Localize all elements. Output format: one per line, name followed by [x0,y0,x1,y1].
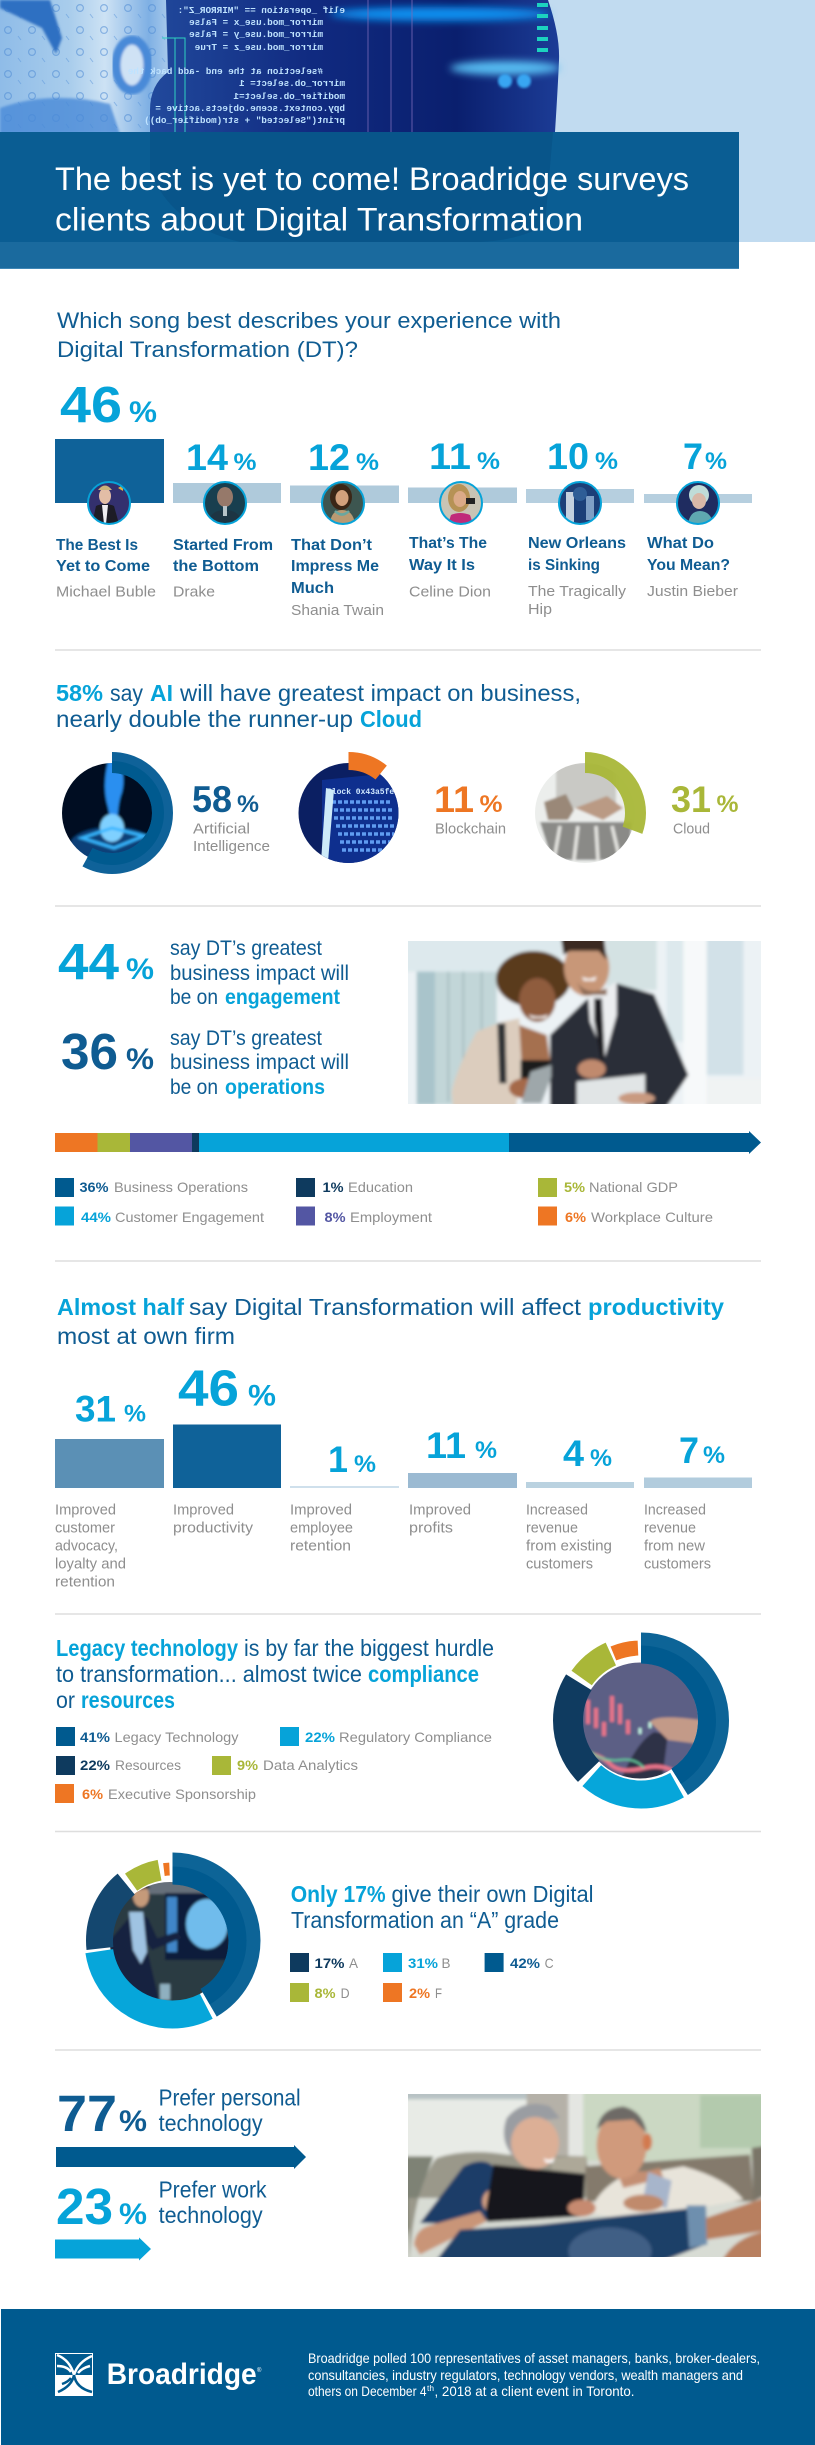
value: 12% [308,437,379,478]
legend: 44% Customer Engagement: Customer Engagement [115,1209,264,1225]
heading: song question [57,308,561,362]
stat: 11% Blockchain: Blockchain [435,820,506,838]
chart: legacy technology donut [567,1646,715,1794]
stat: 31% Cloud: % [716,791,738,818]
legend: 5% National GDP: 5% [564,1179,586,1195]
legend: 8% Employment [296,1206,432,1226]
stat: 58% Artificial Intelligence: 58 [192,779,232,820]
stat: 58% Artificial Intelligence [192,779,270,855]
heading: legacy technology: resources [81,1687,175,1713]
label: revenue existing customers: Increased [526,1502,588,1519]
stat: 77% prefer personal: 77 [57,2085,117,2142]
heading: A grade: Transformation an “A” grade [291,1907,559,1933]
legend: 6% Workplace Culture: 6% [565,1209,587,1225]
label: New Orleans is Sinking: New Orleans [528,535,626,552]
heading: legacy technology: compliance [368,1661,479,1687]
label: Started From the Bottom [173,537,273,600]
value: 1% [328,1439,376,1480]
stat: 44% engagement: % [126,953,154,986]
panel: DT grades [98,1866,594,2014]
legend: 31% B [383,1953,450,1972]
value: 4% [563,1433,612,1474]
stat: 44% engagement [58,933,349,1009]
value: 11% [426,1425,497,1466]
chart: AI donut 58% [62,752,173,874]
panel: personal vs work technology [55,2088,761,2260]
heading: AI impact [56,680,581,732]
label: customer advocacy [55,1502,126,1591]
heading: AI impact: say [110,680,143,706]
value: 11%: % [475,1437,497,1464]
label: customer advocacy: retention [55,1574,115,1591]
legend: 36% Business Operations: Business Operations [114,1179,248,1195]
label: profits: profits [409,1520,453,1537]
value: 46%: % [248,1380,276,1412]
value: 14%: % [234,449,256,476]
label: revenue existing customers: revenue [526,1520,578,1537]
value: 14% [186,437,256,478]
legend: 44% Customer Engagement: 44% [81,1209,112,1225]
legend: 1% Education [296,1178,413,1197]
arrow: 23% [55,2238,151,2260]
label: That's The Way It Is: That’s The [409,535,487,552]
value: 12%: % [356,449,379,476]
stat: 23% prefer work [56,2177,267,2235]
stat: 77% prefer personal: Prefer personal [159,2084,301,2110]
icon: portrait Shania Twain [322,482,364,524]
heading: productivity: Almost half [57,1294,184,1320]
stat: 36% operations [61,1023,349,1099]
code text: mirror_mod.use_x = False [189,17,323,28]
footer text: th [427,2384,434,2393]
label: revenue new customers: from new [644,1538,705,1555]
label: What Do You Mean?: Justin Bieber [647,583,738,600]
value: 46%: 46 [178,1360,239,1416]
value: 7%: % [705,448,727,475]
legend: 17% A: 17% [314,1955,345,1971]
legend: 42% C [485,1953,554,1972]
footer text: , 2018 at a client event in Toronto. [434,2383,634,2399]
icon: portrait Drake [204,482,246,524]
label: The Best Is Yet to Come: The Best Is [56,537,138,554]
icon: portrait Justin Bieber [677,482,719,524]
chart: blockchain donut 11%: Block 0x43a5fe [327,788,394,797]
title: The best is yet to come! Broadridge surveys [55,161,689,197]
legend: 22% Resources: Resources [115,1757,181,1773]
heading: AI impact: AI [150,680,173,706]
icon: portrait The Tragically Hip [559,482,601,524]
label: employee retention: Improved [290,1502,352,1519]
stat: 23% prefer work: % [119,2198,147,2231]
value: 10% [547,436,618,477]
stat: 77% prefer personal: technology [159,2110,263,2136]
legend: 6% Workplace Culture [538,1206,713,1226]
label: New Orleans is Sinking: Hip [528,601,552,618]
heading: AI impact: nearly double the runner-up [56,706,353,732]
label: revenue existing customers [526,1502,612,1573]
title: clients about Digital Transformation [55,202,583,238]
stat: 31% Cloud: Cloud [673,820,710,838]
stat: 44% engagement: say DT’s greatest [170,937,322,960]
title [55,161,689,238]
footer text: others on December 4 [308,2383,427,2399]
value: 7% [679,1430,725,1471]
label: What Do You Mean?: What Do [647,535,714,552]
stat: 36% operations: 36 [61,1023,118,1080]
label: revenue new customers: revenue [644,1520,696,1537]
code text: mirror_ob.select= 1 [239,78,345,89]
legend: 2% F: F [435,1985,442,2001]
label: That Don't Impress Me Much: That Don’t [291,537,372,554]
heading: legacy technology: is by far the biggest hurdle [244,1635,494,1661]
label: customer advocacy: Improved [55,1502,116,1519]
panel: header [0,0,815,269]
value: 7% [683,436,727,477]
value: 46%: % [129,396,157,429]
code text: mirror_mod.use_z = True [194,42,323,53]
panel: footer [1,2309,815,2445]
stat: 11% Blockchain: 11 [434,779,474,820]
legend: 8% D: 8% [314,1985,336,2001]
photo: two colleagues with tablet [408,941,761,1104]
label: revenue new customers: Increased [644,1502,706,1519]
photo: couple on sofa [408,2094,761,2257]
stat: 23% prefer work: technology [159,2202,263,2228]
footer text: consultancies, industry regulators, technology vendors, wealth managers and [308,2367,743,2383]
value: 46%: 46 [60,376,122,433]
value: 1%: 1 [328,1439,348,1480]
legend: 8% D [290,1983,350,2002]
legend: 5% National GDP: National GDP [589,1179,678,1195]
legend: 9% Data Analytics: 9% [237,1757,259,1773]
heading: productivity: productivity [588,1294,724,1320]
stat: 31% Cloud [671,779,738,838]
legend: 41% Legacy Technology [56,1727,238,1746]
label: revenue existing customers: customers [526,1556,593,1573]
value: 4%: 4 [563,1433,584,1474]
legend: 17% A: A [349,1955,359,1971]
heading: legacy technology: or [56,1687,75,1713]
label: revenue existing customers: from existing [526,1538,612,1555]
value: 7%: % [703,1442,725,1469]
chart: cloud donut 31% [535,752,646,863]
label: That's The Way It Is [409,535,491,600]
value: 12%: 12 [308,437,350,478]
heading: legacy technology: Legacy technology [56,1635,238,1661]
heading: A grade [291,1881,594,1933]
value: 11%: 11 [429,436,471,477]
icon: portrait Michael Buble [88,482,130,524]
value: 10%: 10 [547,436,589,477]
legend: 22% Resources: 22% [80,1757,111,1773]
heading: legacy technology: to transformation... almost twice [56,1661,362,1687]
value: 31% [75,1388,146,1430]
heading: productivity [57,1294,724,1349]
label: employee retention: retention [290,1538,351,1555]
label: profits [409,1502,471,1537]
label: New Orleans is Sinking: The Tragically [528,583,627,600]
label: customer advocacy: customer [55,1520,115,1537]
legend: 8% Employment: Employment [350,1209,432,1225]
label: Started From the Bottom: Started From [173,537,273,554]
stat: 31% Cloud: 31 [671,779,711,820]
value: 4%: % [590,1445,612,1472]
legend: 8% D: D [341,1985,350,2001]
label: Started From the Bottom: the Bottom [173,558,259,575]
stat: 36% operations: be on [170,1076,218,1099]
label: That Don't Impress Me Much [291,537,384,619]
legend: 22% Resources [56,1756,181,1775]
code text: elif _operation == "MIRROR_Z": [178,5,345,16]
stat: 58% Artificial Intelligence: Artificial [193,820,250,838]
code text: #selection at the end -add back the [127,66,323,77]
stat: 58% Artificial Intelligence: % [237,791,259,818]
label: employee retention [290,1502,353,1555]
label: New Orleans is Sinking: is Sinking [528,557,600,574]
legend: 6% Executive Sponsorship [55,1784,256,1803]
value: 31%: 31 [75,1388,116,1430]
legend: 22% Regulatory Compliance [280,1727,492,1746]
legend: 36% Business Operations [55,1178,248,1197]
legend: 41% Legacy Technology: Legacy Technology [114,1729,238,1745]
label: Started From the Bottom: Drake [173,584,215,600]
label: customer advocacy: advocacy, [55,1538,118,1555]
code text: bpy.context.scene.objects.active = [155,103,345,114]
logo: Broadridge wordmark: Broadridge [107,2358,257,2391]
footer text: Broadridge polled 100 representatives of asset managers, banks, broker-dealers, [308,2350,760,2366]
legend: 44% Customer Engagement [55,1206,264,1226]
chart: grades donut [98,1866,246,2014]
legend: 6% Executive Sponsorship: 6% [82,1786,104,1802]
value: 7%: 7 [683,436,703,477]
value: 10%: % [595,448,618,475]
code text [127,5,345,126]
heading: A grade: give their own Digital [392,1881,594,1907]
stat: 36% operations: business impact will [170,1051,349,1074]
label: The Best Is Yet to Come [56,537,156,600]
label: What Do You Mean?: You Mean? [647,557,730,574]
heading: AI impact: Cloud [360,706,422,732]
stacked bar arrow [55,1131,761,1154]
legend: 31% B: 31% [408,1955,439,1971]
code text: print("Selected" + str(modifier_ob)) [144,115,345,126]
heading: AI impact: will have greatest impact on business, [179,680,581,706]
label: New Orleans is Sinking [528,535,627,618]
label: That Don't Impress Me Much: Shania Twain [291,602,384,619]
arrow: 77% [56,2145,306,2169]
label: The Best Is Yet to Come: Michael Buble [56,584,156,600]
heading: A grade: Only 17% [291,1881,386,1907]
legend: 31% B: B [442,1955,450,1971]
label: The Best Is Yet to Come: Yet to Come [56,558,150,575]
label: revenue new customers: customers [644,1556,711,1573]
value: 7%: 7 [679,1430,699,1471]
heading: AI impact: 58% [56,680,103,706]
legend: 8% Employment: 8% [324,1209,346,1225]
label: revenue new customers [644,1502,711,1573]
stat: 23% prefer work: 23 [56,2178,113,2235]
value: 11%: % [477,448,500,475]
legend: 2% F: 2% [409,1985,431,2001]
label: productivity [173,1502,254,1537]
stat: 11% Blockchain [434,779,506,838]
value: 46% [60,376,157,433]
label: That Don't Impress Me Much: Impress Me [291,558,379,575]
panel: business impact [55,933,773,1226]
legend: 1% Education: Education [348,1179,413,1195]
value: 31%: % [124,1400,146,1428]
label: What Do You Mean? [647,535,738,600]
stat: 77% prefer personal: % [119,2105,147,2138]
value: 1%: % [354,1451,376,1478]
logo: Broadridge mark [55,2353,93,2396]
legend: 42% C: C [545,1955,554,1971]
value: 46% [178,1360,276,1416]
stat: 58% Artificial Intelligence: Intelligence [193,838,270,855]
stat: 11% Blockchain: % [480,791,502,818]
heading: legacy technology [56,1635,494,1713]
heading: song question: Digital Transformation (DT)? [57,337,358,362]
stat: 36% operations: say DT’s greatest [170,1027,322,1050]
legend: 42% C: 42% [510,1955,541,1971]
label: customer advocacy: loyalty and [55,1556,126,1573]
panel: productivity [55,1294,752,1591]
label: productivity: Improved [173,1502,234,1519]
label: productivity: productivity [173,1520,254,1537]
code text: modifier_ob.select=1 [233,91,345,102]
stat: 44% engagement: engagement [225,986,340,1009]
chart: blockchain donut 11% [296,761,400,865]
bar chart: productivity [55,1424,752,1488]
stat: 77% prefer personal [57,2084,301,2142]
heading: song question: Which song best describes your experience with [57,308,561,333]
footer text [308,2350,760,2399]
stat: 44% engagement: be on [170,986,218,1009]
heading: productivity: most at own firm [57,1323,235,1349]
legend: 22% Regulatory Compliance: 22% [305,1729,336,1745]
legend: 6% Executive Sponsorship: Executive Sponsorship [108,1786,256,1802]
stat: 44% engagement: business impact will [170,962,349,985]
value: 14%: 14 [186,437,228,478]
stat: 36% operations: operations [225,1076,325,1099]
label: That Don't Impress Me Much: Much [291,580,334,597]
legend: 17% A [290,1953,359,1972]
panel: AI impact [50,680,738,876]
label: That's The Way It Is: Celine Dion [409,584,491,600]
legend: 5% National GDP [538,1178,678,1197]
legend: 22% Regulatory Compliance: Regulatory Compliance [339,1729,492,1745]
icon: portrait Celine Dion [440,482,482,524]
stat: 36% operations: % [126,1043,154,1076]
logo: Broadridge wordmark: ® [257,2367,262,2374]
legend: 2% F [383,1983,442,2002]
legend: 9% Data Analytics: Data Analytics [263,1757,358,1773]
panel: song survey [55,308,752,619]
legend: 41% Legacy Technology: 41% [80,1729,111,1745]
label: employee retention: employee [290,1520,353,1537]
legend: 9% Data Analytics [212,1756,358,1775]
code text: mirror_mod.use_y = False [189,29,323,40]
legend: 36% Business Operations: 36% [80,1179,109,1195]
stat: 23% prefer work: Prefer work [159,2177,267,2203]
label: profits: Improved [409,1502,471,1519]
heading: productivity: say Digital Transformation will affect [189,1294,582,1320]
value: 11%: 11 [426,1425,466,1466]
bar chart: songs [55,439,752,503]
stat: 44% engagement: 44 [58,933,120,990]
panel: legacy technology [55,1635,715,1803]
value: 11% [429,436,500,477]
label: That's The Way It Is: Way It Is [409,557,475,574]
legend: 1% Education: 1% [322,1179,344,1195]
legend: 6% Workplace Culture: Workplace Culture [591,1209,713,1225]
